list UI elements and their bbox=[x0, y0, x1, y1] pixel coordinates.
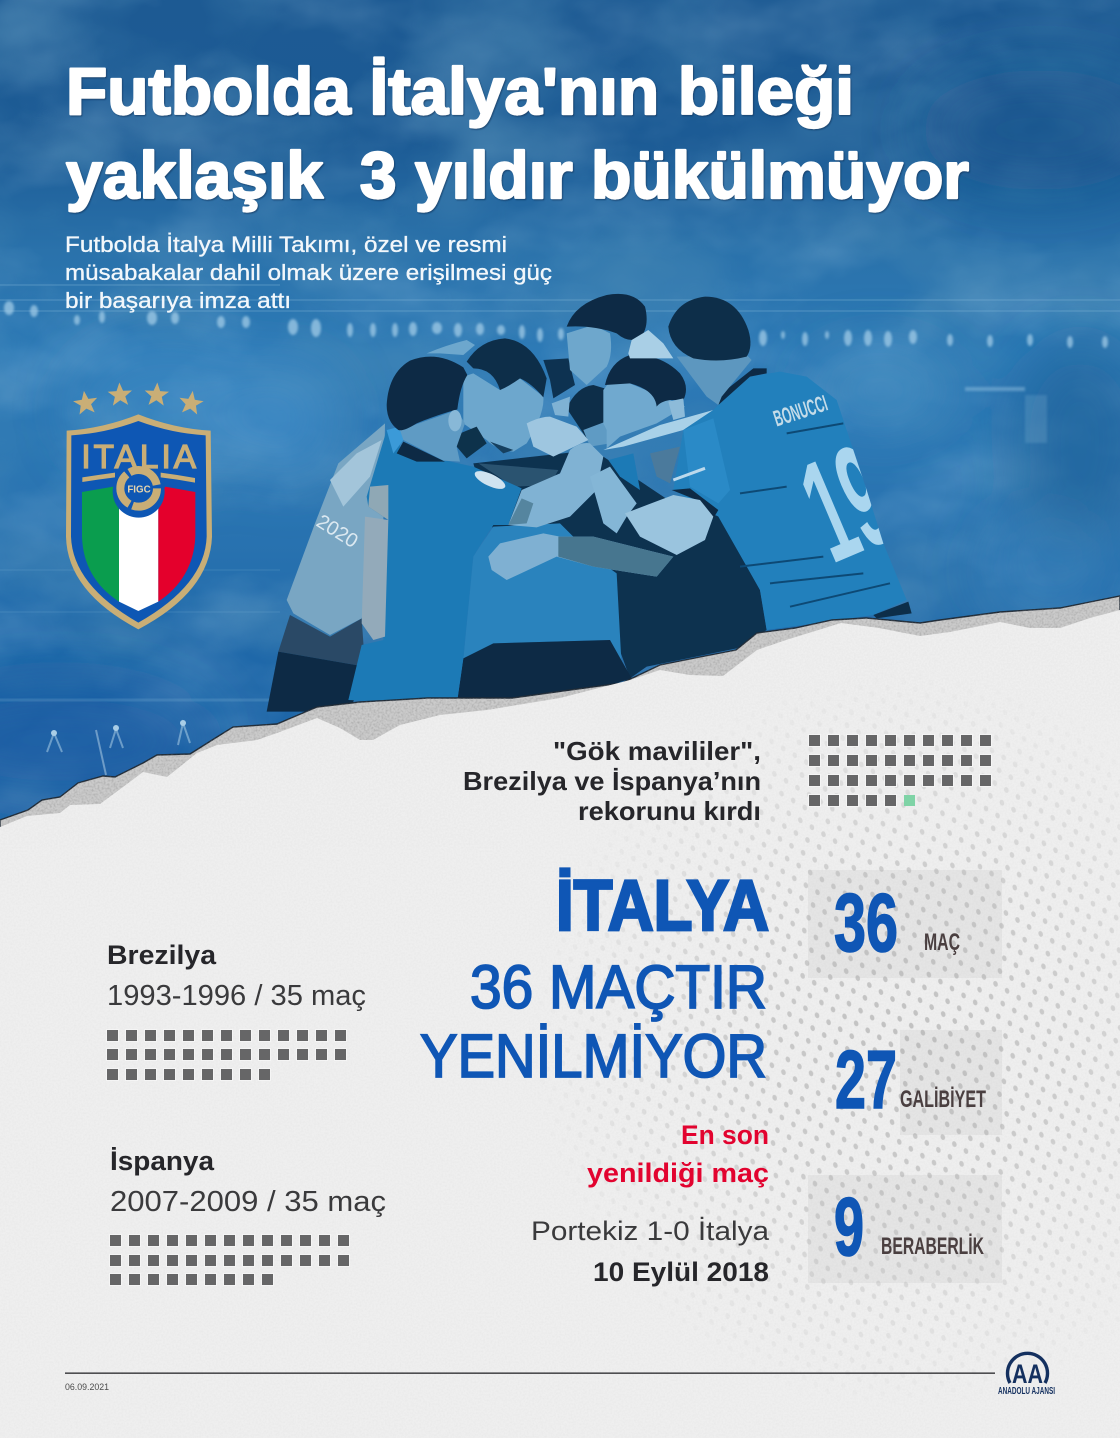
stat: 9 draws: 9 bbox=[834, 1180, 864, 1273]
last defeat: 10 Eylül 2018 bbox=[593, 1257, 769, 1287]
title: yaklaşık 3 yıldır bükülmüyor bbox=[66, 138, 969, 212]
block: Spain record: 2007-2009 / 35 maç bbox=[110, 1186, 386, 1218]
pictogram: Spain 35 matches bbox=[109, 1234, 350, 1286]
heading: record broken bbox=[463, 736, 761, 826]
block: Spain record: İspanya bbox=[110, 1146, 215, 1176]
player: right head bbox=[668, 297, 752, 405]
logo: Anadolu Ajansı bbox=[998, 1353, 1055, 1397]
icon: FIGC Italia crest: FIGC bbox=[127, 484, 151, 495]
subtitle bbox=[65, 232, 552, 313]
player: rear grey shirt bbox=[267, 423, 385, 712]
title bbox=[66, 54, 969, 212]
background: stadium photo bbox=[0, 0, 1120, 840]
block: Brazil record: Brezilya bbox=[107, 940, 217, 970]
last defeat: Portekiz 1-0 İtalya bbox=[531, 1215, 770, 1246]
player: rear center head bbox=[552, 385, 610, 447]
stat: 36 matches: MAÇ bbox=[924, 929, 960, 956]
heading: record broken: Brezilya ve İspanya’nın bbox=[463, 766, 761, 796]
headline: Italy 36 matches unbeaten: İTALYA bbox=[556, 867, 769, 946]
torn paper panel bbox=[0, 596, 1120, 1438]
player: rear grey shirt: 2020 bbox=[312, 511, 362, 553]
stat: 27 wins: 27 bbox=[835, 1033, 897, 1126]
player: top head bbox=[543, 294, 647, 398]
date: 06.09.2021 bbox=[65, 1382, 109, 1392]
player: left shirt bbox=[348, 427, 522, 705]
logo: Anadolu Ajansı: ANADOLU AJANSI bbox=[998, 1386, 1055, 1397]
block: Brazil record: 1993-1996 / 35 maç bbox=[107, 980, 366, 1012]
last defeat bbox=[531, 1120, 770, 1287]
headline: Italy 36 matches unbeaten: YENİLMİYOR bbox=[420, 1022, 767, 1090]
subtitle: Futbolda İtalya Milli Takımı, özel ve resmi bbox=[65, 232, 507, 257]
player: right shirt with name and number: BONUCCI bbox=[770, 390, 831, 431]
pictogram: Italy 36 matches bbox=[808, 734, 992, 807]
stat: 27 wins bbox=[835, 1030, 1002, 1135]
subtitle: müsabakalar dahil olmak üzere erişilmesi güç bbox=[65, 260, 552, 285]
player: center-right face bbox=[603, 355, 686, 448]
subtitle: bir başarıya imza attı bbox=[65, 288, 291, 313]
stat: 27 wins: GALİBİYET bbox=[900, 1086, 986, 1113]
title: Futbolda İtalya'nın bileği bbox=[66, 54, 854, 128]
player: bearded head bbox=[457, 338, 547, 458]
last defeat: En son bbox=[681, 1120, 769, 1150]
block: Brazil record bbox=[106, 940, 366, 1081]
headline: Italy 36 matches unbeaten: 36 MAÇTIR bbox=[470, 953, 767, 1021]
player: left head bbox=[387, 340, 475, 462]
player: right arm bbox=[625, 495, 713, 555]
icon: FIGC Italia crest: ITALIA bbox=[81, 439, 197, 476]
icon: FIGC Italia crest bbox=[66, 382, 212, 629]
player: right shirt with name and number bbox=[672, 368, 913, 630]
block: Spain record bbox=[109, 1146, 386, 1286]
last defeat: yenildiği maç bbox=[587, 1158, 769, 1188]
stat: 9 draws: BERABERLİK bbox=[881, 1233, 984, 1260]
stat: 36 matches: 36 bbox=[834, 876, 898, 969]
arms and hands bbox=[488, 330, 713, 580]
heading: record broken: "Gök mavililer", bbox=[553, 736, 761, 766]
heading: record broken: rekorunu kırdı bbox=[578, 796, 761, 826]
player: central shirt and shorts bbox=[457, 523, 632, 705]
headline: Italy 36 matches unbeaten bbox=[420, 867, 769, 1090]
players: central dark mass bbox=[473, 450, 767, 678]
photo: Italian players huddle bbox=[267, 294, 913, 712]
pictogram: Brazil 35 matches bbox=[106, 1029, 347, 1081]
logo: Anadolu Ajansı: AA bbox=[1012, 1359, 1043, 1389]
stat: 9 draws bbox=[808, 1175, 1002, 1283]
player: right shirt with name and number: 19 bbox=[781, 414, 913, 594]
stat: 36 matches bbox=[808, 870, 1002, 978]
